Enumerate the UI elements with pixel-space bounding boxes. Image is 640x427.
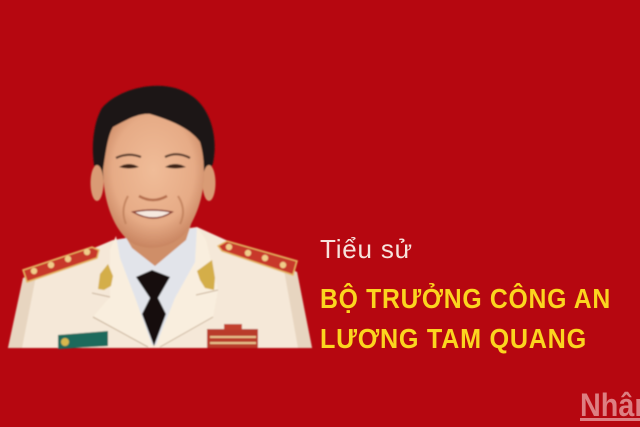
hair	[93, 86, 215, 180]
stars on boards	[31, 244, 286, 274]
left lapel	[93, 236, 153, 348]
shirt	[115, 228, 197, 345]
title line 1: BỘ TRƯỞNG CÔNG AN	[320, 283, 611, 314]
right lapel	[155, 227, 218, 348]
tie	[136, 270, 170, 346]
medal ribbons	[207, 329, 258, 348]
name tag	[58, 331, 108, 349]
neck	[117, 218, 193, 266]
title line 2: LƯƠNG TAM QUANG	[320, 323, 587, 354]
uniform jacket	[8, 227, 312, 348]
gold collar insignia	[98, 264, 113, 290]
left shoulder board	[23, 247, 99, 282]
nose shadow	[139, 196, 167, 200]
mouth	[133, 210, 172, 218]
face	[103, 114, 204, 248]
eyebrows and eyes	[116, 155, 141, 158]
smile lines	[123, 196, 183, 224]
right shoulder board	[218, 241, 297, 275]
subtitle: Tiểu sử: Tiểu sử	[320, 234, 413, 264]
ears	[90, 165, 104, 201]
